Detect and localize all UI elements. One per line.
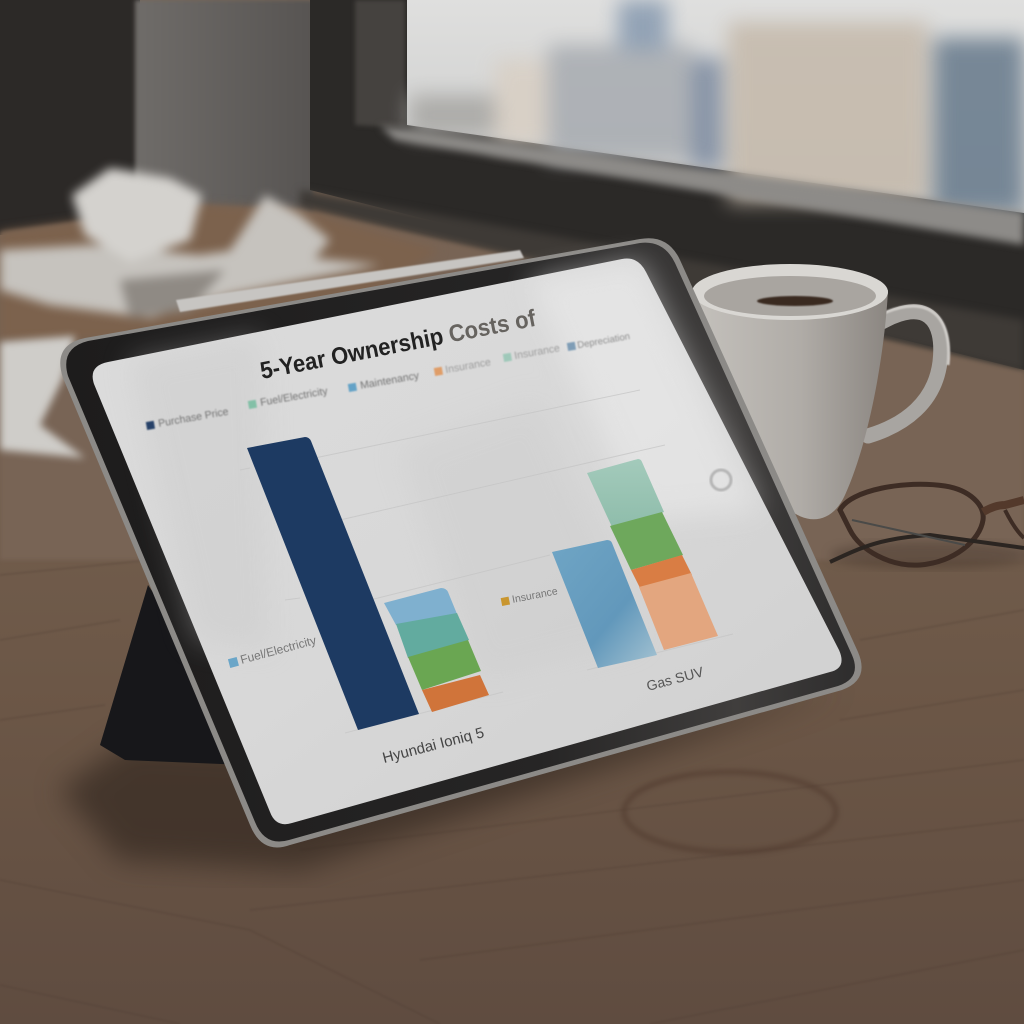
bars: Gas SUV xyxy=(552,459,718,668)
legend: Depreciation xyxy=(576,331,631,351)
tablet screen xyxy=(93,259,842,824)
mug xyxy=(692,264,949,519)
legend: Insurance xyxy=(513,342,561,362)
label: Hyundai Ioniq 5: Hyundai Ioniq 5 xyxy=(381,724,486,767)
grid lines xyxy=(240,390,733,733)
window with blurred city xyxy=(407,0,1024,213)
screen glare xyxy=(130,260,760,680)
wood grain xyxy=(0,560,1024,1024)
loose papers left xyxy=(0,336,85,458)
stacked costs xyxy=(384,588,489,712)
background wall and window xyxy=(0,0,1024,372)
window sill xyxy=(380,126,1024,245)
desk far edge xyxy=(0,205,1024,560)
stylus xyxy=(176,250,524,312)
glasses xyxy=(830,484,1024,569)
bars: Hyundai Ioniq 5 xyxy=(247,437,489,730)
legend xyxy=(145,331,631,432)
in-chart label: fuel/electricity: Fuel/Electricity xyxy=(239,633,318,667)
blue bar xyxy=(552,540,657,668)
stacked costs xyxy=(587,459,718,650)
legend: Insurance xyxy=(444,356,492,376)
legend: Fuel/Electricity xyxy=(259,385,329,409)
purchase price bar xyxy=(247,437,419,730)
legend: Maintenancy xyxy=(359,370,421,392)
label: Gas SUV: Gas SUV xyxy=(645,663,706,694)
tablet shadow xyxy=(60,690,840,870)
tablet kickstand xyxy=(100,585,245,765)
legend: Purchase Price xyxy=(157,406,230,430)
in-chart label: insurance: Insurance xyxy=(511,585,559,606)
loading circle reflection xyxy=(711,470,731,490)
tablet body xyxy=(60,238,862,848)
glasses shadow xyxy=(830,541,1024,569)
crumpled paper xyxy=(0,168,380,318)
coffee ring stain xyxy=(624,772,836,852)
mug body xyxy=(693,290,888,519)
chart title: 5-Year Ownership Costs of xyxy=(258,305,539,385)
mug handle xyxy=(868,312,941,436)
